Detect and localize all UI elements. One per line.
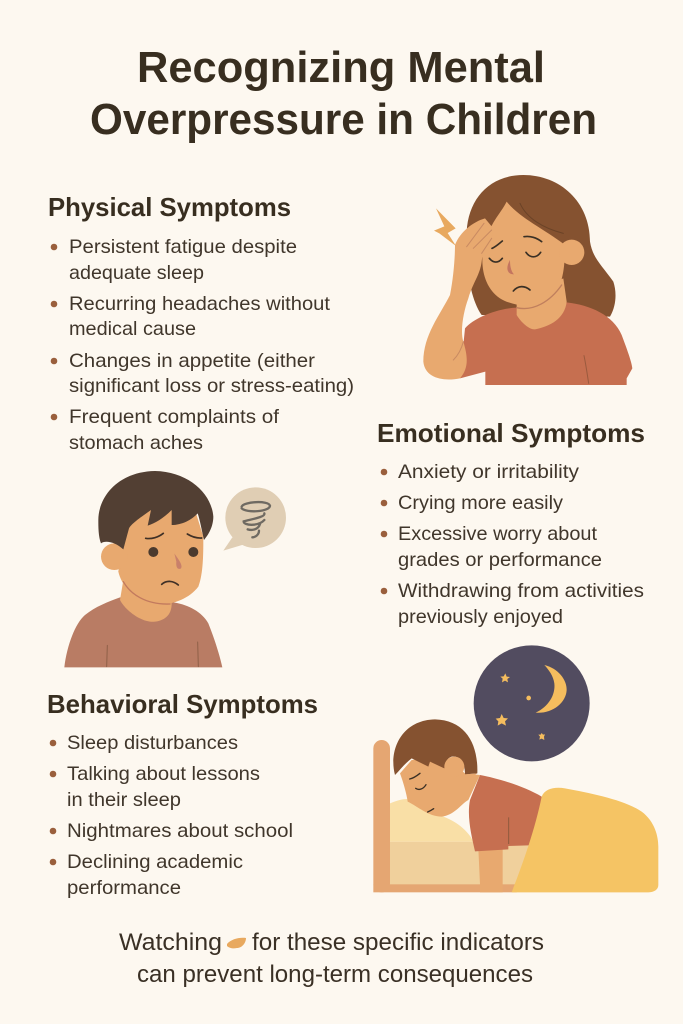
icon: lightning bolt [434,208,456,246]
closing message: for these specific indicators [252,929,544,956]
list: emotional symptoms: Anxiety or irritability [398,461,579,483]
heading: behavioral symptoms: Behavioral Symptoms [47,689,318,719]
list: emotional symptoms [381,461,644,628]
list: behavioral symptoms: Sleep disturbances [67,732,238,754]
list: physical symptoms: Changes in appetite (either [69,350,316,372]
list: behavioral symptoms: in their sleep [67,789,181,811]
title [90,43,597,144]
list: behavioral symptoms: Nightmares about school [67,820,293,842]
list: emotional symptoms: Crying more easily [398,492,563,514]
icon: pencil mark [227,938,246,948]
closing message: Watching [119,929,222,956]
title: Recognizing Mental [137,43,545,92]
list: physical symptoms: stomach aches [69,432,203,454]
illustration: worried boy with thought bubble [64,471,286,667]
illustration: child sleeping in bed [373,645,658,892]
list: emotional symptoms: previously enjoyed [398,606,563,628]
heading: physical symptoms: Physical Symptoms [48,192,291,222]
list: physical symptoms: significant loss or stress-eating) [69,375,354,397]
list: emotional symptoms: Withdrawing from activities [398,580,644,602]
list: physical symptoms: Persistent fatigue despite [69,236,297,258]
list: physical symptoms [51,236,354,454]
closing message: can prevent long-term consequences [137,961,533,988]
list: physical symptoms: Recurring headaches without [69,293,331,315]
icon: thought bubble with swirl [223,487,286,551]
panel: emotional symptoms [377,418,645,628]
list: behavioral symptoms: Declining academic [67,851,243,873]
illustration: girl with headache [423,175,632,385]
icon: night sky with moon and stars [474,645,590,761]
list: physical symptoms: adequate sleep [69,262,204,284]
heading: emotional symptoms: Emotional Symptoms [377,418,645,448]
list: physical symptoms: medical cause [69,318,196,340]
list: behavioral symptoms: Talking about lessons [67,763,260,785]
list: behavioral symptoms [50,732,293,899]
list: behavioral symptoms: performance [67,877,181,899]
list: physical symptoms: Frequent complaints of [69,406,280,428]
panel: physical symptoms [48,192,354,454]
title: Overpressure in Children [90,95,597,144]
list: emotional symptoms: grades or performance [398,549,602,571]
panel: behavioral symptoms [47,689,318,899]
closing message [119,929,544,988]
list: emotional symptoms: Excessive worry about [398,523,598,545]
